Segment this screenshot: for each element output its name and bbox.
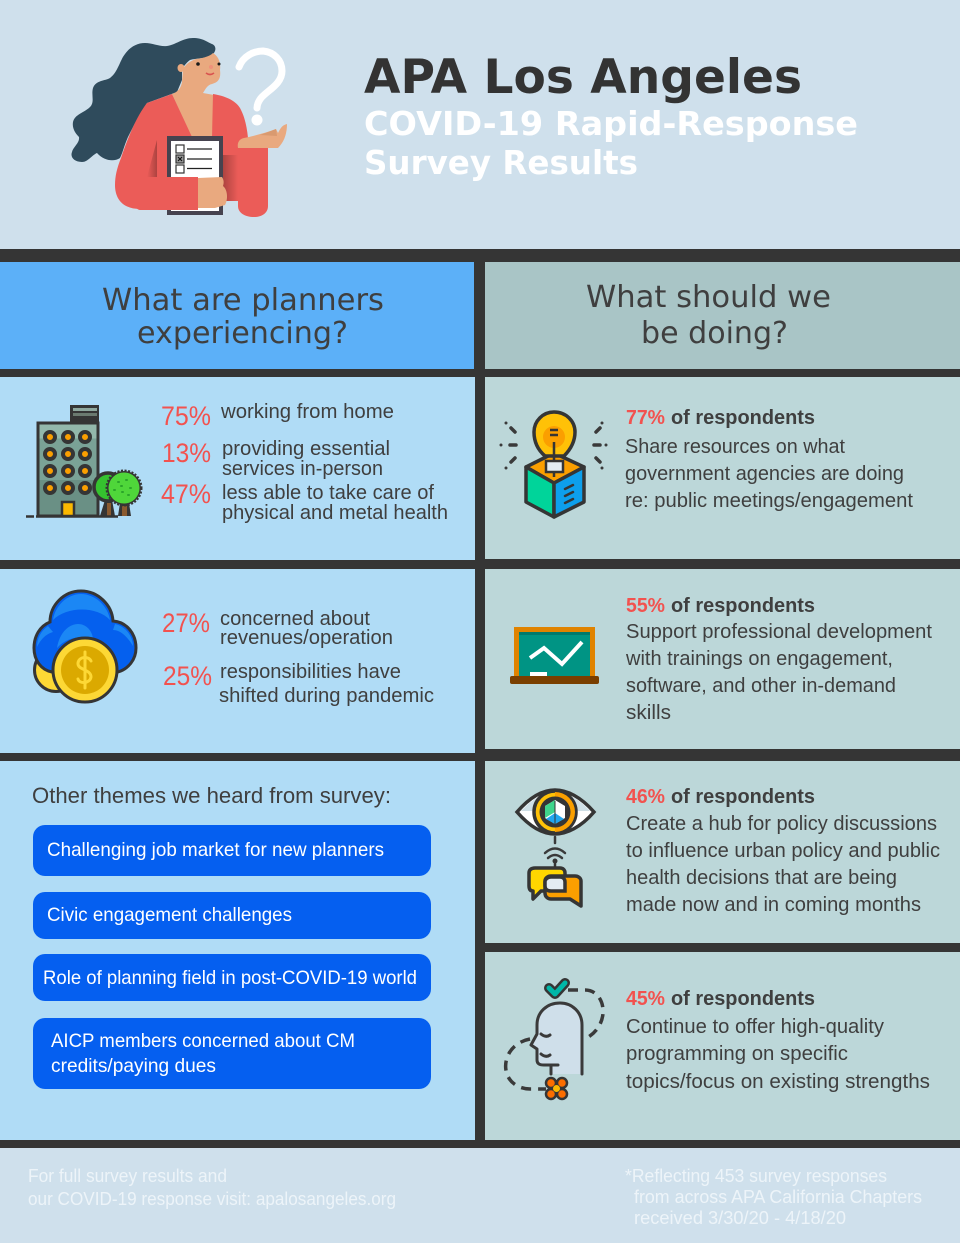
stat: 25% responsibilities shifted: 25% [163,661,212,691]
panel: work statistics [0,377,475,560]
text: 55% of respondents [625,595,932,724]
pill: AICP members [33,1018,431,1089]
pill: civic engagement [33,892,431,939]
illustration: woman with clipboard and question mark [71,38,287,217]
icon: chalkboard with chart [510,627,599,684]
text: 45% of respondents: topics/focus on existing strengths [626,1071,930,1093]
panel: footer [0,1148,960,1243]
subtitle: Survey Results [364,143,638,182]
icon: office building with trees [26,405,141,516]
text: survey footnote [625,1166,922,1228]
pill: job market: Challenging job market for new planners [47,839,384,861]
panel: finance statistics [0,569,475,753]
stat: 75% working from home [161,401,394,431]
stat: 75% working from home: 75% [161,401,211,431]
text: 77% of respondents: 77% [626,407,665,429]
text: 45% of respondents: of respondents [671,988,815,1010]
panel: 45% high-quality programming [485,952,960,1140]
text: 55% of respondents: Support professional development [626,621,932,643]
text: 77% of respondents: government agencies are doing [625,463,904,485]
title: APA Los Angeles [364,50,802,105]
pill: role of planning: Role of planning field in post-COVID-19 world [43,967,417,989]
subtitle [364,104,858,182]
stat: 13% providing essential services: providing essential [222,438,390,460]
panel: left heading: What are planners [102,283,384,318]
text: 45% of respondents: 45% [626,988,665,1010]
text: 46% of respondents: to influence urban policy and public [626,840,940,862]
icon: lightbulb in box [501,412,606,517]
text: 46% of respondents: Create a hub for policy discussions [626,813,937,835]
stat: 47% less able to take care of health: physical and metal health [222,502,448,524]
panel: left heading [0,262,474,369]
text: 45% of respondents: programming on specific [626,1043,848,1065]
pill: role of planning [33,954,431,1001]
stat: 47% less able to take care of health: less able to take care of [222,482,434,504]
stat: 27% concerned about revenues [162,608,393,649]
pill: civic engagement: Civic engagement challenges [47,904,292,926]
text: 55% of respondents: software, and other in-demand [626,675,896,697]
stat: 25% responsibilities shifted: responsibilities have [220,661,401,683]
stat: 13% providing essential services: services in-person [222,458,383,480]
subtitle: COVID-19 Rapid-Response [364,104,858,143]
text: survey footnote: from across APA California Chapters [634,1187,922,1207]
text: 55% of respondents: skills [626,702,671,724]
text: 55% of respondents: 55% [626,595,665,617]
panel: left heading: experiencing? [137,316,348,351]
icon: cloud with coins [34,591,136,702]
stat: 25% responsibilities shifted: shifted during pandemic [219,685,434,707]
stat: 13% providing essential services [162,438,390,480]
text: 46% of respondents: made now and in coming months [626,894,921,916]
icon: eye with chat bubbles [517,790,594,906]
text: 46% of respondents [626,786,940,916]
text: 45% of respondents [626,988,930,1093]
text: 55% of respondents: with trainings on engagement, [625,648,893,670]
panel: right heading [485,262,960,369]
heading: other themes: Other themes we heard from survey: [32,783,391,808]
text: survey link: For full survey results and [28,1166,227,1186]
text: 77% of respondents: of respondents [671,407,815,429]
stat: 47% less able to take care of health: 47% [161,479,211,509]
panel: right heading: What should we [586,280,831,315]
stat: 75% working from home: working from home [220,401,394,423]
stat: 13% providing essential services: 13% [162,438,211,468]
text: survey link: our COVID-19 response visit: apalosangeles.org [28,1189,396,1209]
panel: other themes [0,761,475,1140]
pill: job market [33,825,431,876]
stat: 47% less able to take care of health [161,479,448,524]
panel: header [0,0,960,249]
text: 46% of respondents: health decisions that are being [626,867,897,889]
text: 46% of respondents: 46% [626,786,665,808]
pill: AICP members: AICP members concerned about CM [51,1030,355,1052]
text: survey link [28,1166,396,1209]
panel: 55% professional development [485,569,960,749]
stat: 27% concerned about revenues: 27% [162,608,210,638]
panel: right heading: be doing? [641,316,788,351]
panel: 46% policy hub [485,761,960,943]
text: 77% of respondents: re: public meetings/engagement [625,490,913,512]
text: survey footnote: received 3/30/20 - 4/18/20 [634,1208,846,1228]
text: 77% of respondents [625,407,913,512]
text: 45% of respondents: Continue to offer high-quality [626,1016,884,1038]
text: survey footnote: *Reflecting 453 survey responses [625,1166,887,1186]
text: 46% of respondents: of respondents [671,786,815,808]
text: 55% of respondents: of respondents [671,595,815,617]
stat: 27% concerned about revenues: revenues/operation [220,627,393,649]
pill: AICP members: credits/paying dues [51,1055,216,1077]
stat: 25% responsibilities shifted [163,661,434,707]
icon: head with check and flower [506,983,603,1099]
stat: 27% concerned about revenues: concerned about [220,608,370,630]
panel: 77% share resources [485,377,960,559]
text: 77% of respondents: Share resources on what [625,436,845,458]
